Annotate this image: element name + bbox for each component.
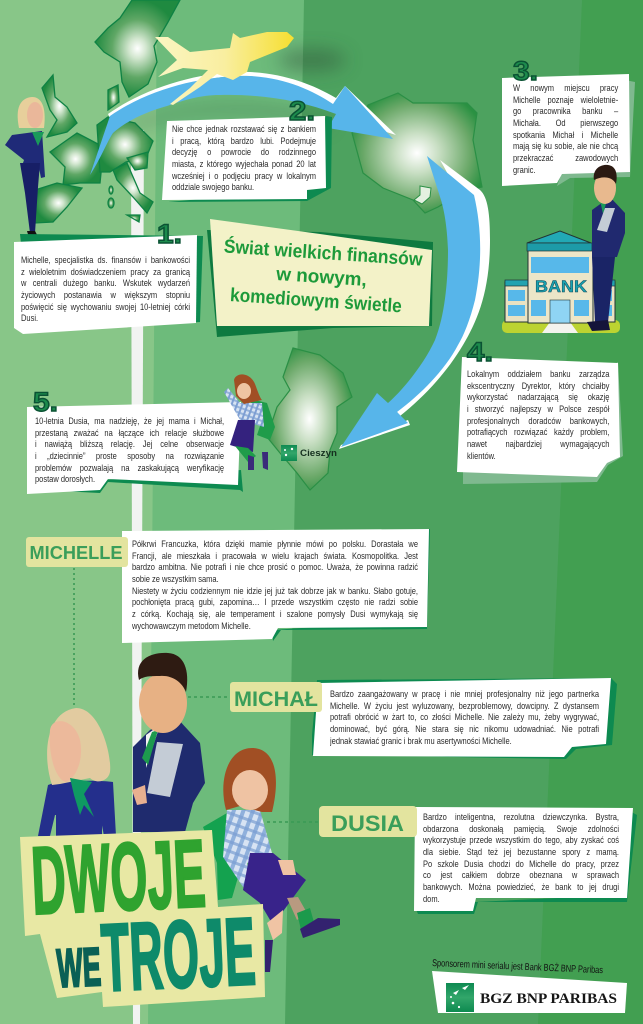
Dusia character panel: dla siebie. Stąd też jej bezustanne spory z mamą. xyxy=(423,846,619,857)
Michelle character panel: Niestety w życiu codziennym nie idzie jej już tak dobrze jak w banku. Słabo gotuje, xyxy=(132,585,418,596)
panel 2: oddziale swojego banku. xyxy=(172,181,254,192)
Michelle character panel: pochłonięta pracą gubi, zapomina… I przede wszystkim często nie radzi sobie xyxy=(132,596,418,607)
blue arc arrow to Poland xyxy=(90,72,396,175)
title text: w nowym, xyxy=(275,264,367,291)
panel 5: postaw dorosłych. xyxy=(35,473,95,484)
Michelle character panel: z córką. Kochają się, ale temperament i szalone pomysły Dusi wymykają się xyxy=(132,608,418,619)
shadow below arc xyxy=(130,104,330,130)
panel 3: go pracownika banku – xyxy=(513,105,618,116)
Michelle standing figure xyxy=(5,97,45,248)
map of Europe xyxy=(35,0,180,223)
Michelle label: MICHELLE xyxy=(30,542,122,563)
Michał portrait xyxy=(132,653,205,832)
shadow behind arrow xyxy=(278,49,346,71)
panel 3: Michała. Od pierwszego xyxy=(513,117,618,128)
Dusia character panel xyxy=(414,807,637,914)
bank building xyxy=(502,231,620,333)
big curved blue arrow xyxy=(339,156,490,449)
map of Poland xyxy=(352,93,482,213)
panel 4: klientów. xyxy=(467,450,496,461)
Michał character panel: dominować, być górą. Nie stara się nic nikomu udowadniać. Nie potrafi xyxy=(330,723,599,734)
panel 5: i nawiążą bliższą relację. Jej celne obserwacje xyxy=(35,438,224,449)
panel 1: Dusi. xyxy=(21,312,38,323)
Dusia character panel: co jest całkiem dobrze obeznana w sprawach xyxy=(423,869,619,880)
panel 3: przekraczać zawodowych xyxy=(513,152,618,163)
bank sign: BANK xyxy=(535,277,588,296)
Dusia character panel: wykorzystuje przede wszystkim do tego, aby zyskać coś xyxy=(423,834,619,845)
panel 4: nawet najbardziej wymagających xyxy=(467,438,609,449)
panel 1: w centrali dużego banku. Wskutek wydarzeń xyxy=(21,277,190,288)
panel 2 xyxy=(162,96,332,202)
number 1: 1. xyxy=(157,219,182,249)
panel 1: Michelle, specjalistka ds. finansów i bankowości xyxy=(21,254,190,265)
panel 2: decyzję o powrocie do rodzinnego xyxy=(172,146,316,157)
Michał character panel: Bardzo zaangażowany w pracę i nie mniej profesjonalny niż jego partnerka xyxy=(330,688,599,699)
panel 2: i pracą, którą bardzo lubi. Podejmuje xyxy=(172,135,316,146)
Michelle character panel: Francji, ale mieszkała i pracowała w wielu krajach świata. Kosmopolitka. Jest xyxy=(132,550,418,561)
Michelle label xyxy=(26,537,128,567)
panel 3: spotkania Michał i Michelle xyxy=(513,129,618,140)
sponsor logo: BGZ BNP PARIBAS xyxy=(480,991,617,1007)
Cieszyn logo xyxy=(281,445,297,461)
Michał character panel xyxy=(312,678,617,759)
panel 1: z wieloletnim doświadczeniem pracy za granicą xyxy=(21,266,190,277)
number 3: 3. xyxy=(513,56,538,86)
Michał standing figure xyxy=(587,165,625,331)
panel 3: Michelle poznaje wieloletnie- xyxy=(513,94,618,105)
Dusia character panel: bankowych. Można powiedzieć, że bank to jej drugi xyxy=(423,881,619,892)
Michelle character panel xyxy=(122,529,430,643)
title text: Świat wielkich finansów xyxy=(223,235,423,271)
plane xyxy=(155,32,294,105)
sponsor logo xyxy=(432,971,627,1013)
number 4: 4. xyxy=(467,337,493,367)
title card xyxy=(207,219,433,337)
word: Dwoje: DWOJE xyxy=(29,820,208,935)
girl small figure xyxy=(224,374,275,470)
panel 3: mają się ku sobie, ale nie chcą xyxy=(513,140,618,151)
number 5: 5. xyxy=(33,387,58,417)
panel 4: potrafiących rozwiązać każdy problem, xyxy=(467,426,609,437)
Dusia character panel: Po szkole Dusia chodzi do Michelle do pracy, przez xyxy=(423,858,619,869)
panel 4: ekscentryczny Dyrektor, który chciałby xyxy=(467,380,609,391)
Cieszyn label: Cieszyn xyxy=(300,448,337,459)
panel 3: W nowym miejscu pracy xyxy=(513,82,618,93)
panel 2: wcześniej i o podjęciu pracy w lokalnym xyxy=(172,170,316,181)
Michał character panel: potrafi obrócić w żart to, co złości Michelle. Nie zależy mu, żeby wygrywać, xyxy=(330,711,599,722)
panel 2: miasta, z którego wyjechała ponad 20 lat xyxy=(172,158,316,169)
Dusia label: DUSIA xyxy=(331,811,404,836)
Michelle portrait xyxy=(38,708,116,836)
word: We: WE xyxy=(56,937,102,999)
panel 4: profesjonalnych doradców bankowych, xyxy=(467,415,609,426)
panel 5: przestaną zważać na łączące ich relacje służbowe xyxy=(35,427,224,438)
Dusia character panel: obdarzona doskonałą pamięcią. Swoje zdolności xyxy=(423,823,619,834)
panel 5: i „dziecinnie” proste sposoby na rozwiązanie xyxy=(35,450,224,461)
panel 2: Nie chce jednak rozstawać się z bankiem xyxy=(172,123,316,134)
map of Cieszyn region xyxy=(267,348,352,490)
Dusia label xyxy=(319,806,417,837)
panel 5 xyxy=(27,387,243,494)
Michelle character panel: sobie ze wszystkim sama. xyxy=(132,573,219,584)
panel 3 xyxy=(502,56,635,186)
number 2: 2. xyxy=(289,96,315,126)
Cieszyn mark on Poland map xyxy=(414,186,431,204)
Michelle character panel: bardzo ambitna. Nie potrafi i nie chce prosić o pomoc. Uważa, że powinna radzić xyxy=(132,561,418,572)
Michał character panel: Michelle. W życiu jest wyluzowany, bezproblemowy, dowcipny. Z dystansem xyxy=(330,700,599,711)
panel 1: życiowych postanawia w większym stopniu xyxy=(21,289,190,300)
Dusia character panel: dom. xyxy=(423,893,440,904)
Michelle character panel: wychowawczym metodom Michelle. xyxy=(132,620,251,631)
title logo: Dwoje we Troje: TROJE xyxy=(99,898,258,1012)
Michał label: MICHAŁ xyxy=(234,687,318,711)
Dusia portrait xyxy=(203,748,340,972)
panel 3: granic. xyxy=(513,164,536,175)
Michał character panel: jednak stawiać granic i brak mu asertywności Michelle. xyxy=(330,735,512,746)
Michelle character panel: Półkrwi Francuzka, która dzięki mamie płynnie mówi po polsku. Dorastała we xyxy=(132,538,418,549)
panel 1 xyxy=(14,219,203,334)
title text: komediowym świetle xyxy=(229,285,402,317)
title logo: Dwoje we Troje xyxy=(20,820,265,1014)
panel 1: poświęcić się wychowaniu swojej 10-letniej córki xyxy=(21,301,190,312)
panel 5: 10-letnia Dusia, ma nadzieję, że jej mama i Michał, xyxy=(35,415,224,426)
panel 4 xyxy=(457,337,623,484)
Dusia character panel: Bardzo inteligentna, rezolutna dziewczynka. Bystra, xyxy=(423,811,619,822)
panel 4: Lokalnym oddziałem banku zarządza xyxy=(467,368,609,379)
title text xyxy=(220,235,423,319)
panel 4: wykorzystać nadarzającą się okazję xyxy=(467,391,609,402)
panel 5: problemów pozwalają na zaskakującą weryfikację xyxy=(35,462,224,473)
panel 4: i stworzyć najlepszy w Polsce zespół xyxy=(467,403,609,414)
